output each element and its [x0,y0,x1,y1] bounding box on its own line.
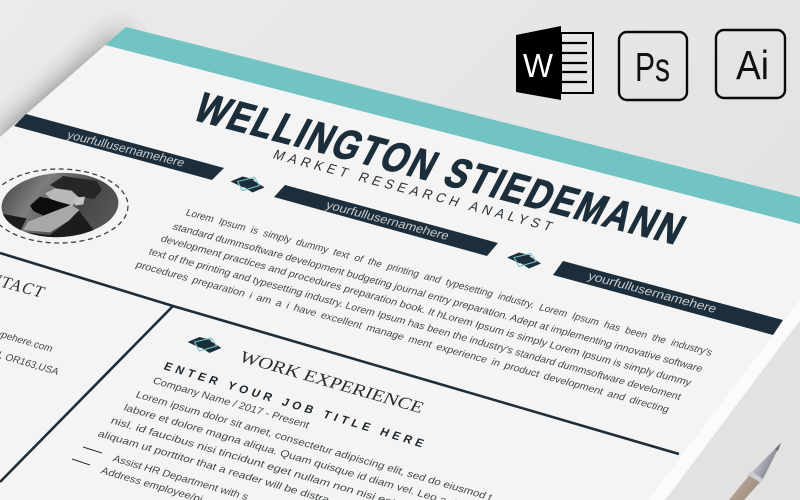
job title subtitle: MARKET RESEARCH ANALYST [271,147,558,235]
company line: Company Name / 2017 - Present [151,376,311,431]
job title heading: ENTER YOUR JOB TITLE HERE [162,361,428,451]
bullet list [72,447,250,500]
work experience heading: WORK EXPERIENCE [236,347,428,417]
ribbon bar 1 [14,114,224,180]
intro paragraph: procedures preparation i am a i have excellent manage ment experience in product development and directing [134,260,671,415]
icon: Illustrator: Ai [736,42,769,88]
job description text: Lorem ipsum dolor sit amet, consectetur adipiscing elit, sed do eiusmod t [134,390,494,500]
job description text: labore et dolore magna aliqua. Quam quisque id diam vel. Leo a d [122,403,458,500]
section divider lines [0,253,679,482]
intro paragraph: development practices and procedures preparation book. It hLorem Ipsum is simply Lorem Ipsum is simply dummy [159,234,693,389]
teal header band [105,27,800,224]
icon: diamonds 1 [230,176,264,192]
ribbon bar 3: yourfullusernamehere [586,270,719,316]
intro paragraph: Lorem Ipsum is simply dummy text of the printing and typesetting industry. Lorem Ipsum has been the industry's [184,208,714,359]
intro paragraph [134,208,714,415]
icon: Word [516,26,593,100]
icon: Illustrator [716,30,785,98]
paper shadow [0,27,126,240]
pen [729,443,781,500]
contact details [0,314,61,378]
icon: Photoshop [619,32,687,100]
ribbon bar 2 [274,185,498,256]
job description text: nisl. id faucibus nisi tincidunt eget nullam non nisi est [109,416,397,500]
icon: Word: W [523,47,554,84]
profile photo [0,169,128,243]
intro paragraph: standard dummsoftware development budgeting journal entry preparation. Adept at implementing innovative software [171,222,705,375]
bullet list: Assist HR Department with s [111,454,250,500]
job description text: aliquam ut porttitor that a reader will be distra [96,429,331,500]
paper edge highlight [648,300,800,500]
ribbon bar 3 [553,261,783,335]
icon: diamonds 3 [188,337,222,353]
ribbon bar 2: yourfullusernamehere [324,199,452,243]
ribbon bar 1: yourfullusernamehere [65,129,187,170]
intro paragraph: text of the printing and typesetting industry. Lorem Ipsum has been the industry's standard dummsoftware develoment [147,247,683,403]
icon: Photoshop: Ps [635,44,670,90]
icon: diamonds 2 [507,252,541,268]
